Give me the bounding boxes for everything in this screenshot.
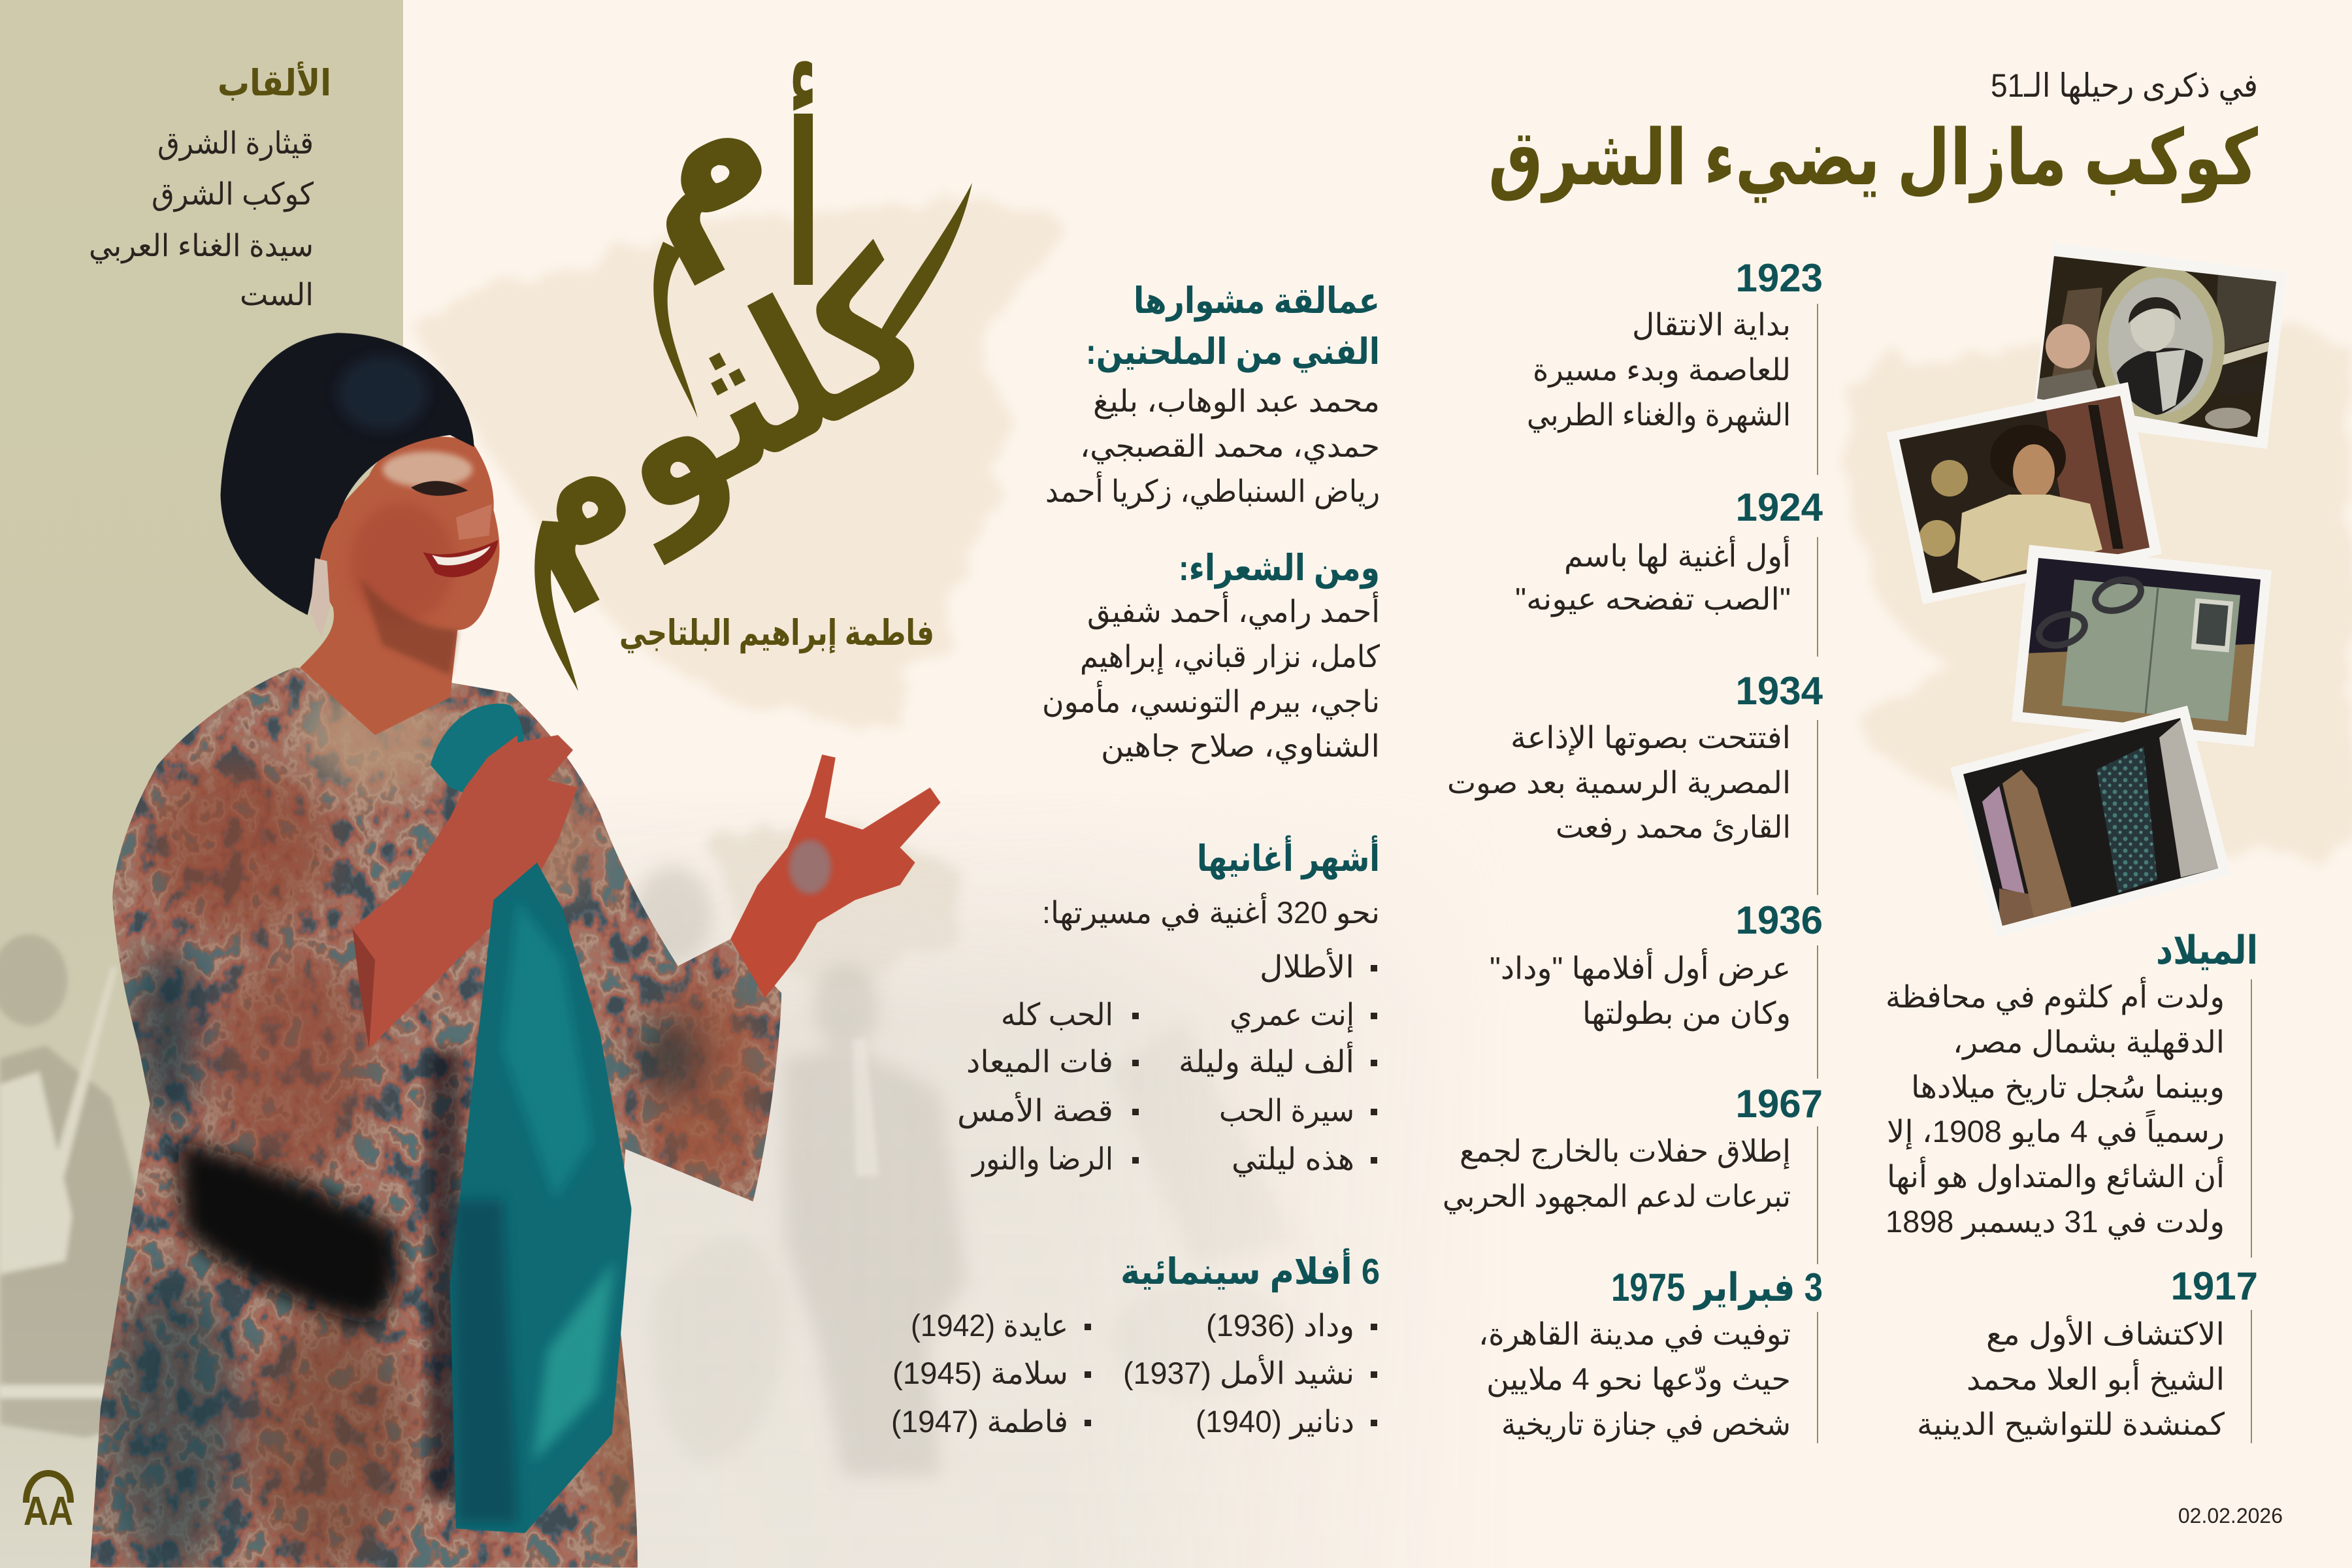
timeline: 1923: بداية الانتقال [1632,307,1791,342]
song list: الحب كله [1001,997,1113,1032]
film list: نشيد الأمل (1937) [1123,1354,1354,1390]
section: composers [1045,280,1380,510]
timeline: birth: ولدت في 31 ديسمبر 1898 [1886,1204,2225,1240]
timeline: birth: رسمياً في 4 مايو 1908، إلا [1887,1110,2225,1150]
timeline: birth: وبينما سُجل تاريخ ميلادها [1911,1070,2225,1105]
timeline: 3 February 1975: شخص في جنازة تاريخية [1501,1407,1791,1443]
section: famous songs [957,835,1380,1177]
song list: ألف ليلة وليلة [1179,1041,1354,1080]
film list [891,1308,1354,1440]
timeline: 1936: 1936 [1736,898,1823,942]
timeline: 1967: 1967 [1736,1082,1823,1126]
timeline: 1934 [1447,669,1823,895]
timeline: 3 February 1975 [1478,1266,1823,1443]
calligraphy title: Umm Kulthum: م [577,25,810,293]
panel title: nicknames: الألقاب [218,61,331,103]
timeline: 1917 [1917,1264,2258,1443]
section: poets: أحمد رامي، أحمد شفيق [1087,591,1380,630]
left arm and hand [353,735,578,1049]
timeline: 1934: افتتحت بصوتها الإذاعة [1511,720,1791,756]
timeline: 1917: كمنشدة للتواشيح الدينية [1917,1407,2225,1443]
section: poets: ومن الشعراء: [1179,547,1380,589]
photo collage [1887,242,2287,937]
photo: passport and glasses [2012,545,2272,747]
timeline: 1967: تبرعات لدعم المجهود الحربي [1443,1179,1791,1215]
section: composers: عمالقة مشوارها [1134,280,1380,322]
section: composers: الفني من الملحنين: [1086,331,1380,373]
section: films: 6 أفلام سينمائية [1120,1248,1380,1293]
timeline: 1924: "الصب تفضحه عيونه" [1515,581,1791,617]
timeline: 1924 [1515,485,1823,657]
song list: هذه ليلتي [1232,1141,1354,1177]
timeline: 1923: الشهرة والغناء الطربي [1527,397,1791,433]
nicknames list: سيدة الغناء العربي [89,228,314,264]
nicknames list: كوكب الشرق [152,176,314,212]
timeline: 1917: الشيخ أبو العلا محمد [1967,1359,2225,1397]
watercolor wash: centre [418,196,1060,987]
film list: سلامة (1945) [892,1356,1068,1390]
portrait: Umm Kulthum [75,333,941,1568]
dark shadow under sleeve [177,1140,399,1323]
swash strokes [534,183,972,691]
date: 02.02.2026 [2178,1504,2283,1527]
calligraphy title: Umm Kulthum: أ [785,59,822,333]
timeline: 1967: إطلاق حفلات بالخارج لجمع [1460,1134,1791,1169]
logo: Anadolu Agency [24,1473,73,1534]
panel: left olive band [0,0,403,1568]
section: poets [1042,547,1380,764]
photo: young portrait [1887,382,2163,604]
logo: Anadolu Agency: AA [24,1489,73,1534]
film list: دنانير (1940) [1196,1404,1354,1440]
song list [957,947,1354,1177]
song bullets [1132,965,1377,1164]
timeline: 3 February 1975: توفيت في مدينة القاهرة، [1478,1316,1791,1352]
timeline: 1936 [1490,898,1823,1079]
song list: قصة الأمس [957,1091,1113,1128]
neck and face [300,436,499,735]
film list: وداد (1936) [1206,1308,1354,1344]
timeline: 1967 [1443,1082,1823,1264]
section: composers: حمدي، محمد القصبجي، [1080,429,1380,465]
hair [221,333,474,615]
song list: فات الميعاد [966,1044,1113,1079]
timeline: 1934: القارئ محمد رفعت [1556,809,1791,845]
nicknames list [89,125,314,312]
calligraphy title: Umm Kulthum [463,25,972,691]
section: poets: ناجي، بيرم التونسي، مأمون [1042,680,1380,720]
earring [310,558,330,638]
timeline: birth: الميلاد [2156,928,2258,972]
section: poets: الشناوي، صلاح جاهين [1101,728,1380,764]
section: films [891,1248,1380,1440]
timeline: birth [1886,928,2258,1258]
timeline: 1936: عرض أول أفلامها "وداد" [1490,948,1791,987]
timeline: birth: الدقهلية بشمال مصر، [1953,1024,2225,1060]
timeline: 3 February 1975: 3 فبراير 1975 [1611,1266,1823,1311]
panel title: nicknames [89,61,331,312]
song list: الرضا والنور [971,1141,1113,1177]
right arm and hand [730,755,941,998]
timeline: 1917: 1917 [2171,1264,2258,1308]
timeline: 1934: المصرية الرسمية بعد صوت [1447,765,1791,801]
background photo: orchestra musicians [0,784,1514,1568]
song list: سيرة الحب [1219,1093,1354,1129]
section: composers: رياض السنباطي، زكريا أحمد [1045,471,1380,510]
film list: عايدة (1942) [911,1308,1068,1343]
subtitle: في ذكرى رحيلها الـ51 [1991,67,2258,105]
timeline: 1936: وكان من بطولتها [1582,996,1791,1032]
film list: فاطمة (1947) [891,1404,1068,1439]
subject name: فاطمة إبراهيم البلتاجي [619,613,934,653]
film bullets [1085,1324,1377,1426]
timeline: 1923: للعاصمة وبدء مسيرة [1533,352,1791,388]
timeline: 1923 [1527,256,1823,475]
nicknames list: قيثارة الشرق [157,125,314,161]
song list: إنت عمري [1230,997,1354,1033]
timeline: 3 February 1975: حيث ودّعها نحو 4 ملايين [1486,1362,1791,1397]
timeline: 1924: 1924 [1736,485,1823,529]
watercolor wash: behind photos [1849,316,2352,853]
section: poets: كامل، نزار قباني، إبراهيم [1080,639,1380,675]
timeline: 1923: 1923 [1736,256,1823,300]
timeline: birth: أن الشائع والمتداول هو أنها [1887,1156,2225,1195]
timeline: birth: ولدت أم كلثوم في محافظة [1886,977,2225,1015]
nicknames list: الست [240,277,314,312]
dress [75,645,810,1568]
calligraphy title: Umm Kulthum: كلثوم [463,214,965,619]
photo: dresses [1950,706,2231,937]
section: famous songs: نحو 320 أغنية في مسيرتها: [1042,892,1380,931]
song list: الأطلال [1260,947,1354,984]
photo: oval portrait [2034,256,2282,449]
timeline: 1917: الاكتشاف الأول مع [1986,1315,2225,1352]
timeline: 1924: أول أغنية لها باسم [1564,536,1791,574]
scarf knot [431,704,524,810]
section: composers: محمد عبد الوهاب، بليغ [1093,384,1380,419]
section: famous songs: أشهر أغانيها [1197,835,1380,880]
scarf [450,862,632,1533]
timeline: 1934: 1934 [1736,669,1823,713]
